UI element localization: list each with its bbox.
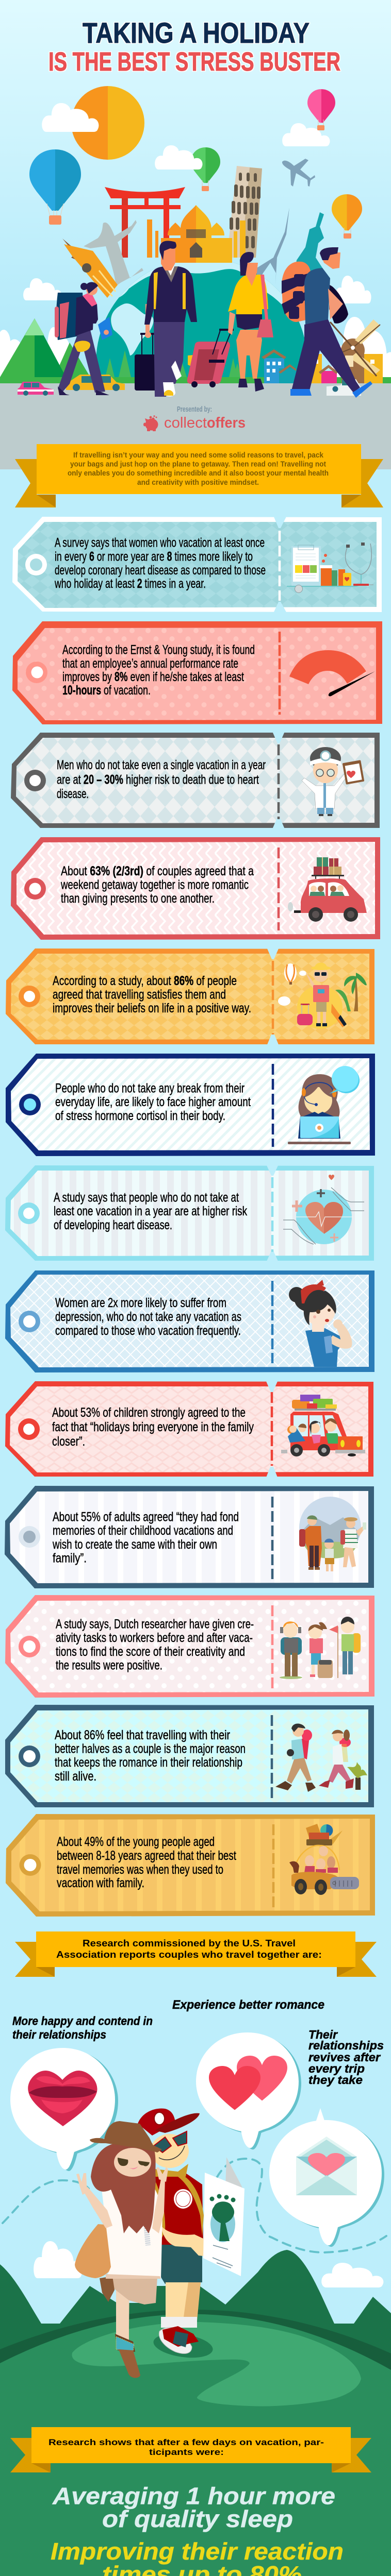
landmark: mosque xyxy=(147,205,246,263)
panel: card 10 childhood memories: memories of their childhood vacations and xyxy=(53,1523,233,1538)
panel: card 2 employee performance: 10-hours of vacation. xyxy=(62,683,151,698)
speech bubble: hearts xyxy=(196,2032,301,2149)
panel: card 3 men heart disease xyxy=(11,732,380,829)
panel: card 11 creativity: the results were positive. xyxy=(56,1658,162,1673)
landmark: leaning tower xyxy=(227,166,262,258)
panel: card 11 creativity: ativity tasks to workers before and after vaca- xyxy=(56,1631,253,1645)
icon: cloud over green balloon xyxy=(155,145,220,191)
label: relationships revive: relationships xyxy=(308,2039,384,2052)
icon: scene clouds xyxy=(34,2241,383,2287)
panel: card 8 depression: Women are 2x more likely to suffer from xyxy=(55,1296,226,1310)
panel: card 10 childhood memories: About 55% of adults agreed “they had fond xyxy=(53,1510,239,1524)
panel: card 6 cortisol: People who do not take any break from their xyxy=(55,1081,245,1096)
panel: card 11 creativity: tions to find the score of their creativity and xyxy=(56,1645,245,1659)
panel: card 4 couples getaway xyxy=(11,837,380,940)
panel: card 8 depression xyxy=(5,1270,374,1372)
panel: card 5 satisfaction xyxy=(6,947,374,1046)
icon: couple hiking xyxy=(275,1724,367,1792)
panel: card 1 heart disease in women: A survey says that women who vacation at least once xyxy=(55,536,265,550)
label: experience better romance: Experience better romance xyxy=(172,1998,324,2012)
traveller: man with orange backpack xyxy=(282,247,372,398)
icon: hiking family xyxy=(299,1497,366,1571)
panel: card 11 creativity xyxy=(5,1595,374,1698)
panel: card 1 heart disease in women: develop coronary heart disease as compared to those xyxy=(55,563,266,578)
panel: card 7 heart disease risk: A study says that people who do not take at xyxy=(54,1191,239,1205)
intro ribbon xyxy=(15,444,383,507)
headline: reaction times xyxy=(51,2538,344,2576)
icon: heart in caring hands xyxy=(283,1175,364,1244)
speech bubble: kiss xyxy=(10,2048,118,2171)
panel: card 6 cortisol: of stress hormone cortisol in their body. xyxy=(55,1109,225,1123)
panel: card 2 employee performance: According to the Ernst & Young study, it is found xyxy=(62,642,255,657)
speech bubble: love letter xyxy=(269,2108,384,2247)
panel: card 2 employee performance: that an employee’s annual performance rate xyxy=(62,656,238,671)
panel: card 10 childhood memories xyxy=(5,1486,374,1588)
ribbon: couples research xyxy=(15,1931,377,1977)
landmark: eiffel tower xyxy=(257,208,289,285)
panel: card 10 childhood memories: wish to create the same with their own xyxy=(52,1537,217,1552)
label: relationships revive xyxy=(308,2028,384,2087)
icon: yellow taxi xyxy=(66,375,125,391)
town buildings and windmill xyxy=(262,319,383,383)
icon: blue balloon xyxy=(29,149,81,225)
ribbon: research on vacation: ticipants were: xyxy=(149,2447,224,2457)
panel: card 5 satisfaction: improves their beliefs on life in a positive way. xyxy=(53,1001,251,1015)
panel: card 13 family memories: between 8-18 years agreed that their best xyxy=(57,1849,236,1863)
panel: card 13 family memories: About 49% of the young people aged xyxy=(57,1835,215,1849)
label: more happy and content xyxy=(12,2014,153,2041)
collectoffers logo: collect xyxy=(164,415,207,431)
panel: card 3 men heart disease: Men who do not take even a single vacation in a year xyxy=(57,758,266,772)
panel: card 3 men heart disease: disease. xyxy=(57,787,89,801)
woman xyxy=(75,2121,168,2378)
panel: card 8 depression: depression, who do not take any vacation as xyxy=(55,1310,241,1324)
icon: airplane xyxy=(282,159,315,187)
panel: card 4 couples getaway: weekend getaway together is more romantic xyxy=(60,877,249,892)
landmark: christ statue xyxy=(84,220,143,286)
panel: card 9 family closeness: closer”. xyxy=(52,1434,85,1449)
headline: quality sleep: of quality sleep xyxy=(102,2505,293,2532)
panel: card 4 couples getaway: than giving presents to one another. xyxy=(61,891,215,906)
ribbon: research on vacation: Research shows that after a few days on vacation, par- xyxy=(48,2437,324,2447)
intro ribbon: only enables you do something incredible and it also boost your mental health xyxy=(68,469,329,478)
title xyxy=(48,16,340,76)
label: relationships revive: they take xyxy=(308,2073,363,2087)
panel: card 1 heart disease in women xyxy=(12,516,382,613)
icon: lips xyxy=(28,2071,97,2126)
panel: card 9 family closeness: About 53% of children strongly agreed to the xyxy=(52,1405,246,1420)
panel: card 7 heart disease risk: least one vacation in a year are at higher risk xyxy=(54,1204,247,1218)
icon: doctor xyxy=(302,747,364,816)
icon: car with gifts xyxy=(288,857,367,922)
icon: tourist at the beach xyxy=(278,962,367,1029)
panel: card 9 family closeness xyxy=(5,1380,373,1479)
ribbon: couples research: Research commissioned by the U.S. Travel xyxy=(83,1938,296,1948)
panel: card 13 family memories: vacation with family. xyxy=(57,1876,144,1890)
icon: yellow balloon xyxy=(332,194,362,239)
panel: card 2 employee performance xyxy=(12,621,382,724)
panel: card 11 creativity: A study says, Dutch researcher have given cre- xyxy=(56,1617,254,1632)
panel: card 8 depression: compared to those who vacation frequently. xyxy=(55,1324,241,1338)
label: relationships revive: revives after xyxy=(308,2050,381,2064)
headline: quality sleep xyxy=(52,2483,335,2532)
label: more happy and content: their relationships xyxy=(12,2028,106,2041)
intro ribbon: your bags and just hop on the plane to getaway. Then read on! Travelling not xyxy=(70,460,326,469)
intro ribbon: If travelling isn’t your way and you need some solid reasons to travel, pack xyxy=(73,451,324,460)
icon: sun xyxy=(71,86,144,160)
panel: card 13 family memories: travel memories was when they used to xyxy=(57,1862,223,1877)
traveller: woman in yellow with red suitcase xyxy=(187,252,273,392)
traveller: woman with backpack xyxy=(55,282,112,395)
intro ribbon: and creativity with positive mindset. xyxy=(137,478,259,487)
panel: card 7 heart disease risk: of developing heart disease. xyxy=(54,1218,172,1232)
panel: card 7 heart disease risk xyxy=(5,1164,374,1262)
label: relationships revive: every trip xyxy=(308,2062,365,2075)
icon: pink car xyxy=(18,382,54,396)
icon: road trip jeep xyxy=(289,1824,359,1895)
icon: two hearts xyxy=(209,2056,287,2110)
title: TAKING A HOLIDAY xyxy=(83,16,309,49)
landmark: clock tower xyxy=(62,239,118,298)
globe xyxy=(96,258,309,381)
dashed travel route xyxy=(3,2159,386,2252)
panel: card 13 family memories xyxy=(6,1814,375,1917)
ribbon: couples research: Association reports couples who travel together are: xyxy=(56,1950,322,1960)
mountains and trees xyxy=(0,318,241,377)
road and presenter band xyxy=(0,383,391,469)
panel: card 9 family closeness: fact that “holidays bring everyone in the family xyxy=(52,1420,254,1434)
panel: card 1 heart disease in women: who holiday at least 2 times in a year. xyxy=(54,577,206,591)
ribbon: research on vacation xyxy=(10,2427,371,2472)
panel: card 10 childhood memories: family”. xyxy=(53,1551,87,1566)
icon: performance gauge xyxy=(289,650,375,696)
icon: three hikers xyxy=(280,1617,361,1679)
icon: pink balloon xyxy=(307,89,335,130)
icon: clouds in the sky xyxy=(0,103,391,384)
panel: card 6 cortisol xyxy=(6,1054,375,1156)
panel: card 12 romance: still alive. xyxy=(55,1769,96,1784)
panel: card 12 romance: better halves as a couple is the major reason xyxy=(55,1742,246,1756)
icon: medical kit xyxy=(287,543,373,592)
panel: card 12 romance: that keeps the romance in their relationship xyxy=(55,1755,242,1770)
grass strip xyxy=(0,377,391,383)
icon: strong woman flexing xyxy=(289,1280,352,1367)
collectoffers logo: offers xyxy=(207,415,246,431)
landmark: statue of liberty xyxy=(293,212,324,285)
icon: support agent with speech bubble xyxy=(288,1066,360,1144)
sky gradient xyxy=(0,0,391,377)
icon: white car xyxy=(327,379,361,396)
headline: quality sleep: Averaging 1 hour more xyxy=(52,2483,335,2510)
panel: card 5 satisfaction: According to a study, about 86% of people xyxy=(53,974,237,988)
illustration: couple with map xyxy=(75,2108,245,2378)
panel: card 5 satisfaction: agreed that travelling satisfies them and xyxy=(53,988,226,1002)
icon: envelope with heart xyxy=(296,2137,357,2195)
panel: card 3 men heart disease: are at 20 – 30% higher risk to death due to heart xyxy=(57,773,259,787)
panel: card 4 couples getaway: About 63% (2/3rd) of couples agreed that a xyxy=(61,864,254,878)
headline: reaction times: Improving their reaction xyxy=(51,2538,344,2565)
presented by credit: Presented by: xyxy=(177,405,212,414)
landmark: torii gate xyxy=(105,187,185,258)
traveller: man with suitcase xyxy=(135,241,199,397)
panel: card 2 employee performance: improves by 8% even if he/she takes at least xyxy=(62,670,244,684)
label: relationships revive: Their xyxy=(308,2028,338,2041)
man xyxy=(138,2108,212,2353)
icon: family car with luggage xyxy=(281,1395,365,1456)
map in man's hand xyxy=(203,2157,245,2276)
panel: card 6 cortisol: everyday life, are likely to face higher amount xyxy=(55,1095,251,1109)
hills and ground xyxy=(0,2250,391,2576)
panel: card 12 romance: About 86% feel that travelling with their xyxy=(55,1728,230,1742)
hero illustration: travellers and landmarks xyxy=(0,86,391,469)
panel: card 12 romance xyxy=(5,1705,374,1807)
panel: card 1 heart disease in women: in every 6 or more year are 8 times more likely to xyxy=(55,549,253,564)
collectoffers logo xyxy=(143,415,246,431)
label: more happy and content: More happy and contend in xyxy=(12,2014,153,2028)
